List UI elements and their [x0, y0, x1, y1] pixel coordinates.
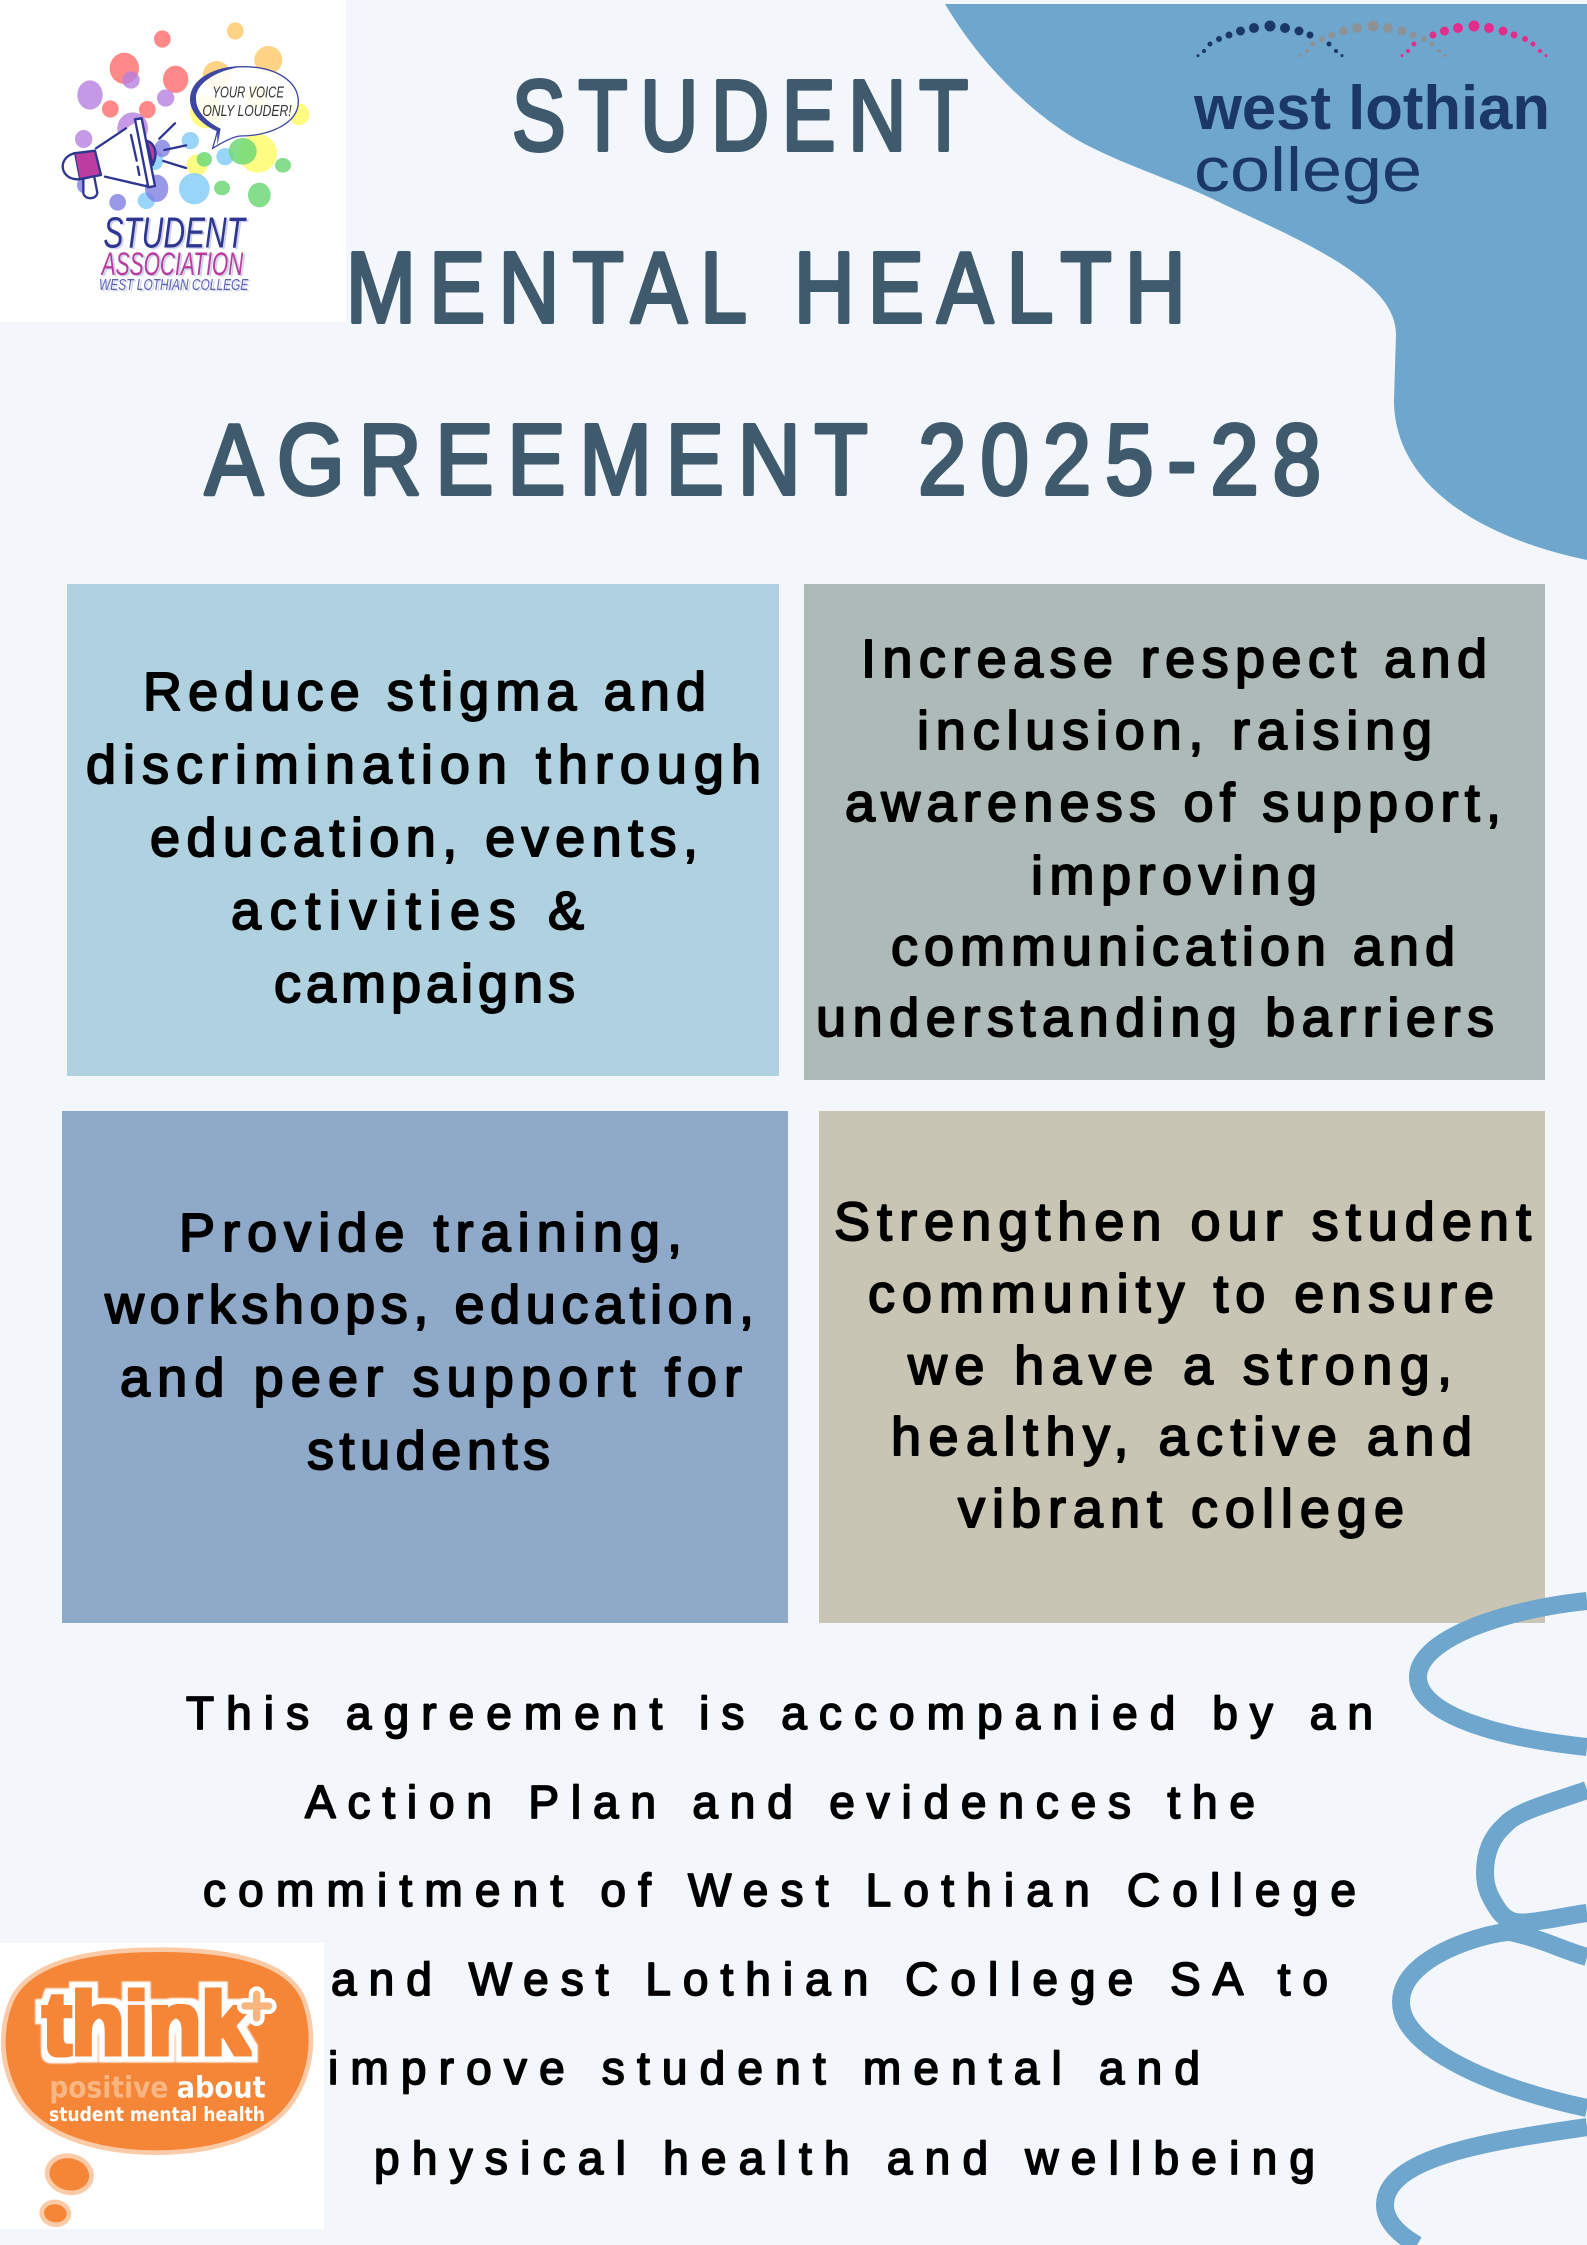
panel: strengthen community: healthy, active and — [891, 1407, 1472, 1467]
panel: strengthen community: vibrant college — [958, 1479, 1404, 1539]
logo: think positive: about — [177, 2071, 266, 2105]
logo text: student association: STUDENT — [103, 209, 247, 257]
logo: west lothian college — [1193, 20, 1550, 205]
logo text: student association — [99, 209, 249, 294]
panel: strengthen community — [819, 1111, 1545, 1623]
panel: strengthen community: community to ensure — [868, 1264, 1494, 1324]
panel: strengthen community: Strengthen our student — [834, 1192, 1531, 1252]
speech bubble — [191, 67, 298, 148]
logo: student association — [0, 0, 346, 322]
decorative blue swirl — [1385, 1601, 1587, 2245]
panel: reduce stigma: discrimination through — [86, 735, 761, 795]
logo: think positive — [0, 1943, 324, 2229]
panel: increase respect: awareness of support, — [845, 773, 1501, 833]
paragraph: agreement statement: improve student mental and — [328, 2042, 1200, 2094]
logo text: student association: WEST LOTHIAN COLLEGE — [99, 277, 249, 294]
panel: provide training: students — [307, 1421, 550, 1481]
panel: strengthen community: we have a strong, — [907, 1336, 1452, 1396]
title: MENTAL HEALTH — [346, 232, 1199, 344]
paragraph: agreement statement: Action Plan and evidences the — [305, 1776, 1255, 1828]
logo text: student mental health: student mental health — [49, 2103, 265, 2126]
paragraph: agreement statement: and West Lothian College SA to — [331, 1953, 1328, 2005]
logo wordmark: college: college — [1194, 136, 1422, 205]
logo wordmark: west lothian: west lothian — [1193, 74, 1550, 143]
logo wordmark: think: think — [43, 1974, 250, 2073]
paragraph: agreement statement: commitment of West Lothian College — [203, 1864, 1356, 1916]
decorative blue corner shape — [945, 4, 1587, 560]
panel: increase respect — [804, 584, 1545, 1080]
paragraph: agreement statement: physical health and wellbeing — [374, 2132, 1315, 2184]
panel: reduce stigma — [67, 584, 779, 1076]
icon: megaphone — [63, 118, 186, 198]
icon: dotted arcs — [1196, 20, 1548, 57]
logo: coloured bubbles — [75, 22, 309, 211]
icon: plus — [245, 1994, 269, 2018]
speech bubble: YOUR VOICE — [212, 84, 284, 101]
panel: provide training: Provide training, — [179, 1203, 682, 1263]
panel: increase respect: inclusion, raising — [917, 701, 1432, 761]
panel: increase respect: improving — [1031, 846, 1317, 906]
panel: reduce stigma: Reduce stigma and — [143, 662, 706, 722]
title: STUDENT — [512, 60, 981, 172]
panel: reduce stigma: education, events, — [150, 808, 698, 868]
title — [205, 60, 1335, 516]
paragraph: agreement statement — [186, 1687, 1373, 2184]
panel: provide training: workshops, education, — [104, 1275, 754, 1335]
panel: increase respect: communication and — [891, 917, 1455, 977]
thought bubble — [3, 1950, 311, 2226]
panel: reduce stigma: activities & — [231, 881, 584, 941]
logo text: positive about: positive — [49, 2071, 168, 2105]
panel: provide training: and peer support for — [120, 1348, 742, 1408]
title: AGREEMENT 2025-28 — [205, 404, 1335, 516]
panel: provide training — [62, 1111, 788, 1623]
logo text: student association: ASSOCIATION — [100, 246, 244, 282]
panel: increase respect: Increase respect and — [861, 629, 1487, 689]
speech bubble: ONLY LOUDER! — [202, 103, 292, 120]
panel: increase respect: understanding barriers — [816, 988, 1494, 1048]
paragraph: agreement statement: This agreement is accompanied by an — [186, 1687, 1373, 1739]
panel: reduce stigma: campaigns — [274, 954, 575, 1014]
